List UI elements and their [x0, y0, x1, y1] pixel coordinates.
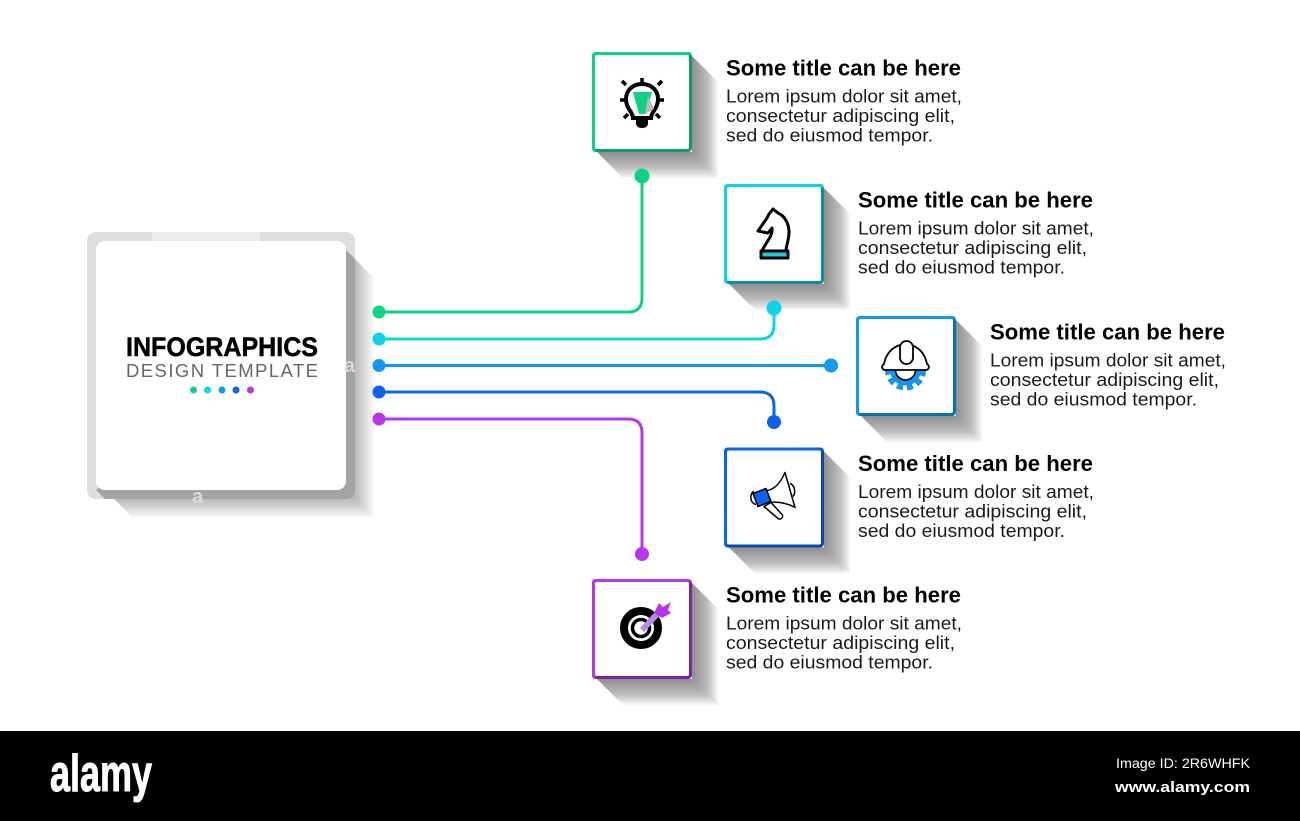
step 2 body: sed do eiusmod tempor.: [858, 258, 1065, 278]
step 1 title: Some title can be here: [726, 56, 961, 80]
connector: dark blue: [372, 386, 781, 429]
step 5 body: Lorem ipsum dolor sit amet,: [726, 614, 962, 634]
step 5 title: Some title can be here: [726, 582, 961, 608]
step 4 body: Lorem ipsum dolor sit amet,: [858, 482, 1094, 502]
icon: chess knight: [758, 209, 789, 258]
panel: main card: [87, 232, 374, 518]
panel: main card: a: [344, 355, 356, 377]
step 5 body: sed do eiusmod tempor.: [726, 652, 933, 672]
step 4 title: Some title can be here: [858, 451, 1093, 476]
step 2 body: Lorem ipsum dolor sit amet,: [858, 218, 1094, 238]
panel: step 4: [724, 448, 1094, 574]
icon: target and arrow: [624, 602, 671, 645]
main subtitle: DESIGN TEMPLATE: [126, 360, 318, 381]
step 4 body: sed do eiusmod tempor.: [858, 521, 1065, 541]
step 3 body: sed do eiusmod tempor.: [990, 390, 1197, 410]
step 1 body: sed do eiusmod tempor.: [726, 126, 933, 146]
step 3 body: Lorem ipsum dolor sit amet,: [990, 350, 1226, 370]
footer logo: alamy: [50, 745, 152, 803]
step 1 body: consectetur adipiscing elit,: [726, 106, 955, 126]
connector: cyan: [372, 300, 782, 346]
step 3 title: Some title can be here: [990, 320, 1225, 344]
icon: light bulb: [620, 78, 664, 128]
colour dots: [190, 386, 254, 394]
step 3 body: consectetur adipiscing elit,: [990, 370, 1219, 390]
step 2 body: consectetur adipiscing elit,: [858, 238, 1087, 258]
panel: step 3: [856, 316, 1226, 442]
step 5 body: consectetur adipiscing elit,: [726, 633, 955, 653]
panel: step 1: [592, 52, 962, 178]
panel: step 2: [724, 184, 1094, 310]
step 1 body: Lorem ipsum dolor sit amet,: [726, 86, 962, 106]
panel: step 5: [592, 579, 962, 705]
panel: main card: a: [192, 486, 204, 508]
step 4 body: consectetur adipiscing elit,: [858, 502, 1087, 522]
footer bar: [0, 731, 1300, 821]
icon: megaphone: [751, 472, 795, 519]
connector: green: [372, 168, 650, 318]
step 2 title: Some title can be here: [858, 188, 1093, 212]
connector: purple: [372, 412, 649, 561]
icon: helmet and gear: [882, 341, 929, 388]
footer url: www.alamy.com: [1114, 779, 1250, 796]
main title: INFOGRAPHICS: [126, 332, 318, 362]
connector: blue: [372, 358, 838, 372]
footer image id: Image ID: 2R6WHFK: [1116, 755, 1251, 771]
